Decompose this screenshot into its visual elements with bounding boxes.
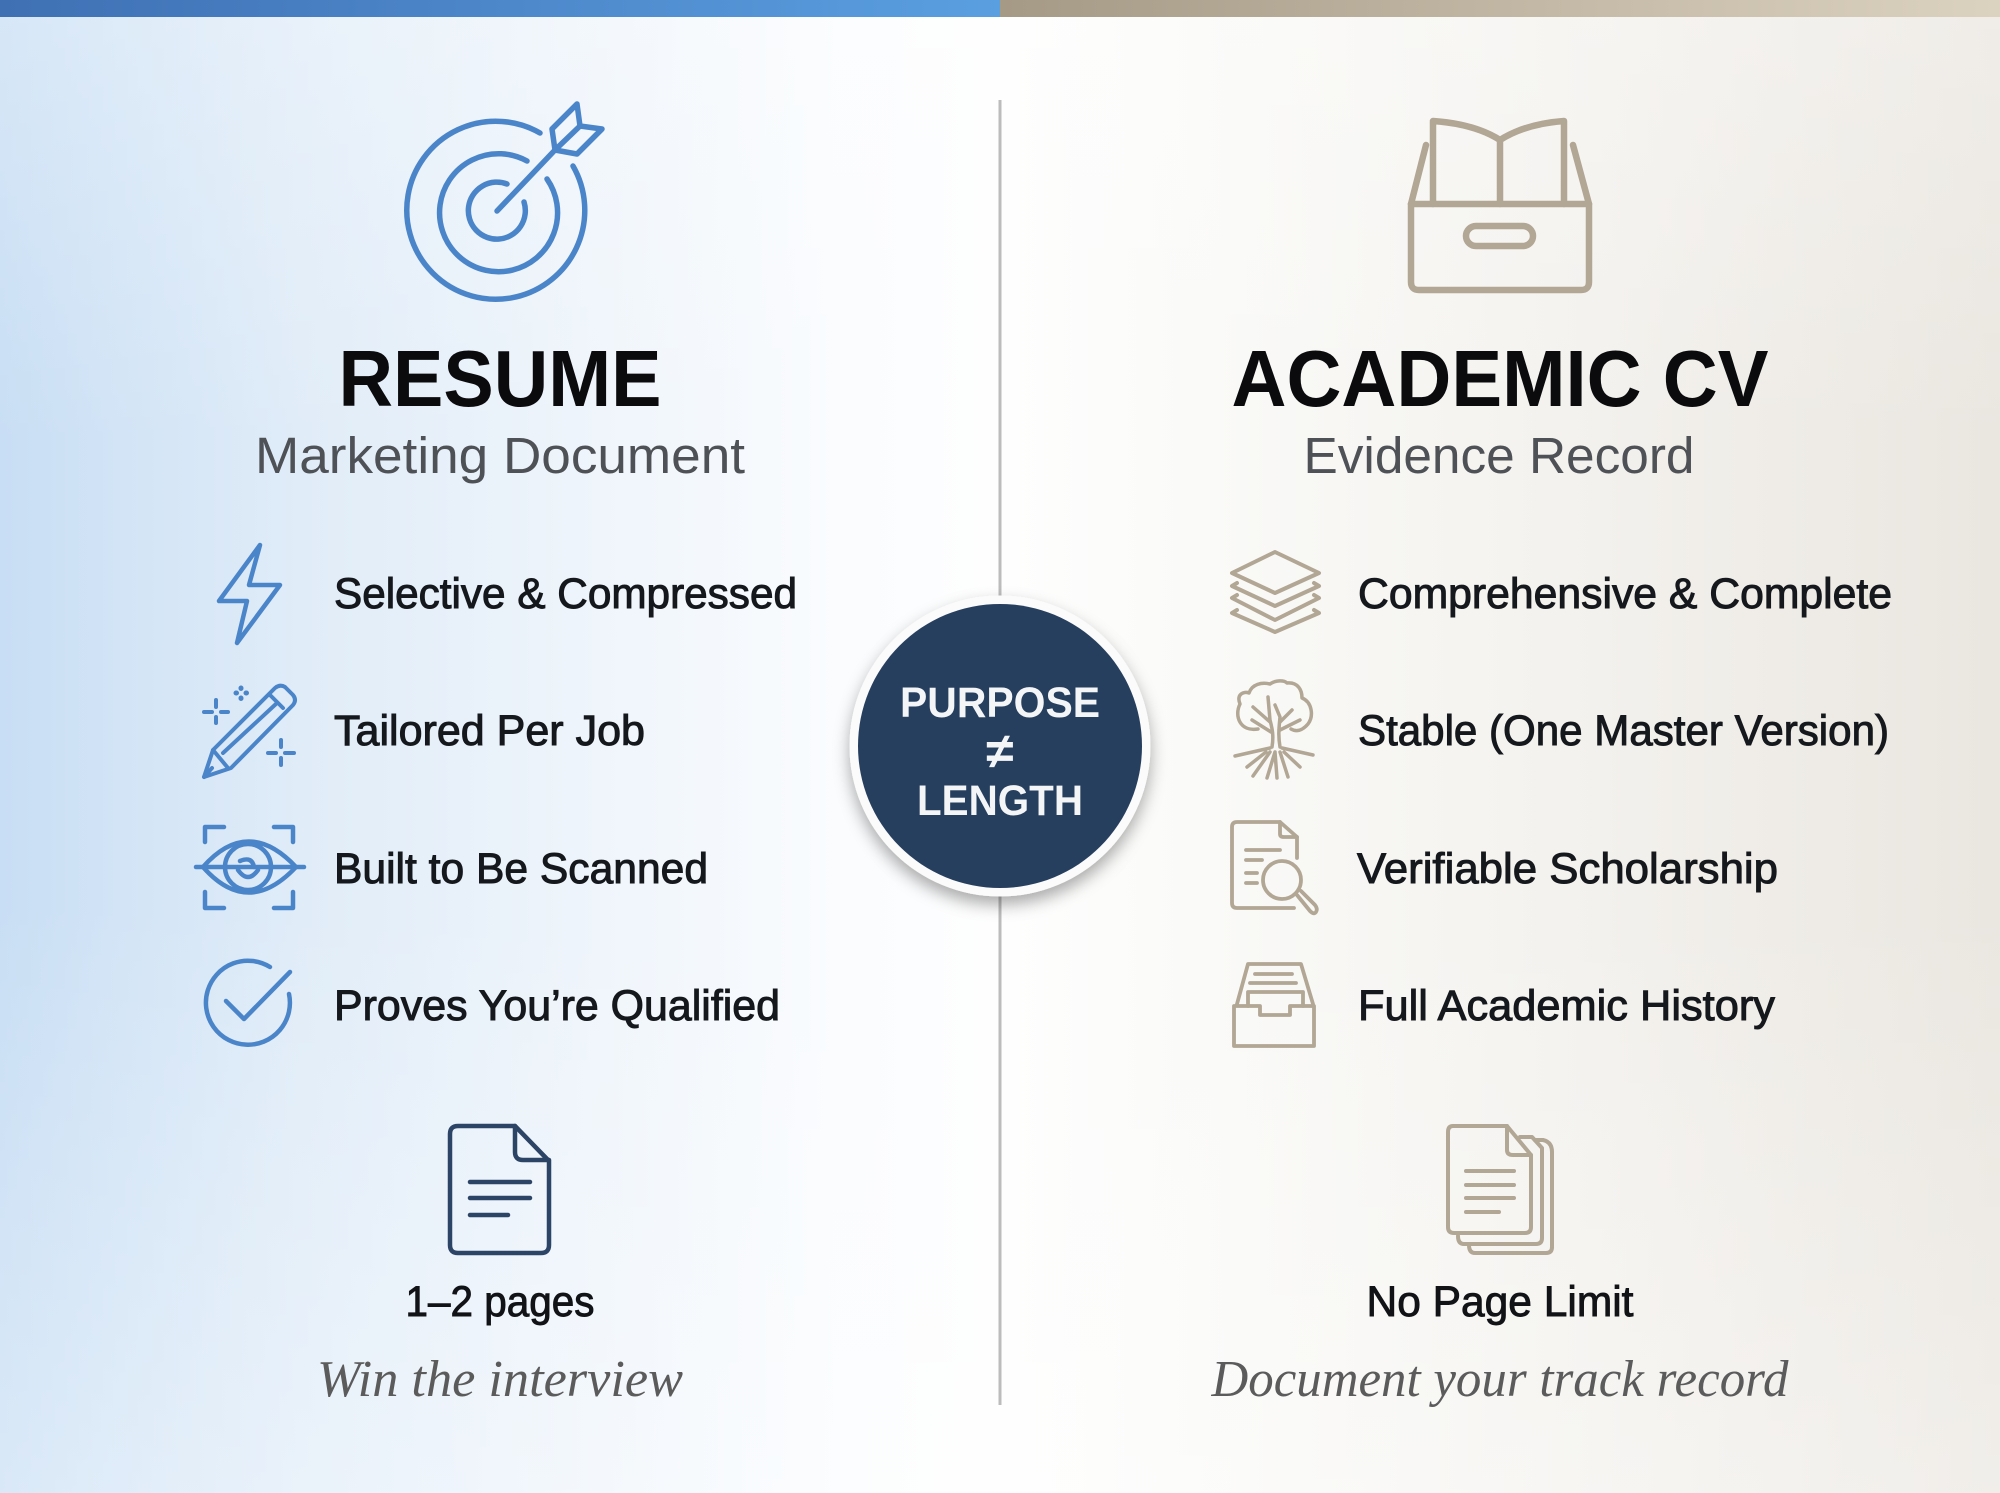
icon: target with arrow (407, 104, 602, 299)
footer: resume length (317, 1126, 683, 1408)
icon: check circle (206, 961, 290, 1045)
tagline: win the interview: Win the interview (317, 1351, 683, 1408)
list item: comprehensive and complete (1232, 552, 1892, 632)
list item: proves you're qualified (206, 961, 780, 1045)
heading: resume: RESUME (338, 334, 662, 423)
center divider line (998, 100, 1002, 1405)
list item: selective and compressed (219, 545, 797, 643)
icon: lightning bolt (219, 545, 280, 643)
top accent bar (0, 0, 2000, 17)
list item: comprehensive and complete: Comprehensive & Complete (1358, 570, 1892, 618)
list item: proves you're qualified: Proves You’re Qualified (334, 982, 780, 1030)
center badge: purpose not equal length: LENGTH (917, 777, 1083, 825)
center badge: purpose not equal length: PURPOSE (900, 679, 1100, 727)
icon: stacked pages (1448, 1126, 1552, 1253)
heading: academic cv: ACADEMIC CV (1232, 334, 1768, 423)
icon: single page document (450, 1126, 549, 1253)
subheading: marketing document: Marketing Document (255, 427, 745, 484)
icon: file tray (1234, 964, 1314, 1046)
center badge: purpose not equal length: ≠ (986, 723, 1014, 779)
list item: full academic history (1234, 964, 1775, 1046)
list item: verifiable scholarship: Verifiable Scholarship (1357, 845, 1778, 893)
list item: selective and compressed: Selective & Compressed (334, 570, 797, 618)
icon: document with magnifier (1232, 822, 1317, 913)
label: no page limit: No Page Limit (1366, 1278, 1634, 1326)
label: 1-2 pages: 1–2 pages (406, 1278, 594, 1326)
list item: tailored per job: Tailored Per Job (334, 707, 645, 755)
icon: scanning eye (196, 827, 304, 908)
icon: open book in box (1411, 121, 1589, 290)
list item: tailored per job (204, 686, 645, 777)
list item: stable: Stable (One Master Version) (1358, 707, 1889, 755)
tagline: document your track record: Document your track record (1211, 1351, 1789, 1408)
list item: stable (1235, 681, 1889, 778)
list item: built to be scanned: Built to Be Scanned (334, 845, 708, 893)
center badge: purpose not equal length (850, 596, 1150, 896)
icon: tree with roots (1235, 681, 1313, 778)
footer: cv length (1211, 1126, 1789, 1408)
list item: verifiable scholarship (1232, 822, 1778, 913)
panel: academic cv (1211, 121, 1892, 1408)
icon: pencil with sparkles (204, 686, 295, 777)
subheading: evidence record: Evidence Record (1304, 427, 1694, 484)
list item: built to be scanned (196, 827, 708, 908)
icon: stacked layers (1232, 552, 1319, 632)
list item: full academic history: Full Academic History (1358, 982, 1775, 1030)
panel: resume (196, 104, 797, 1408)
